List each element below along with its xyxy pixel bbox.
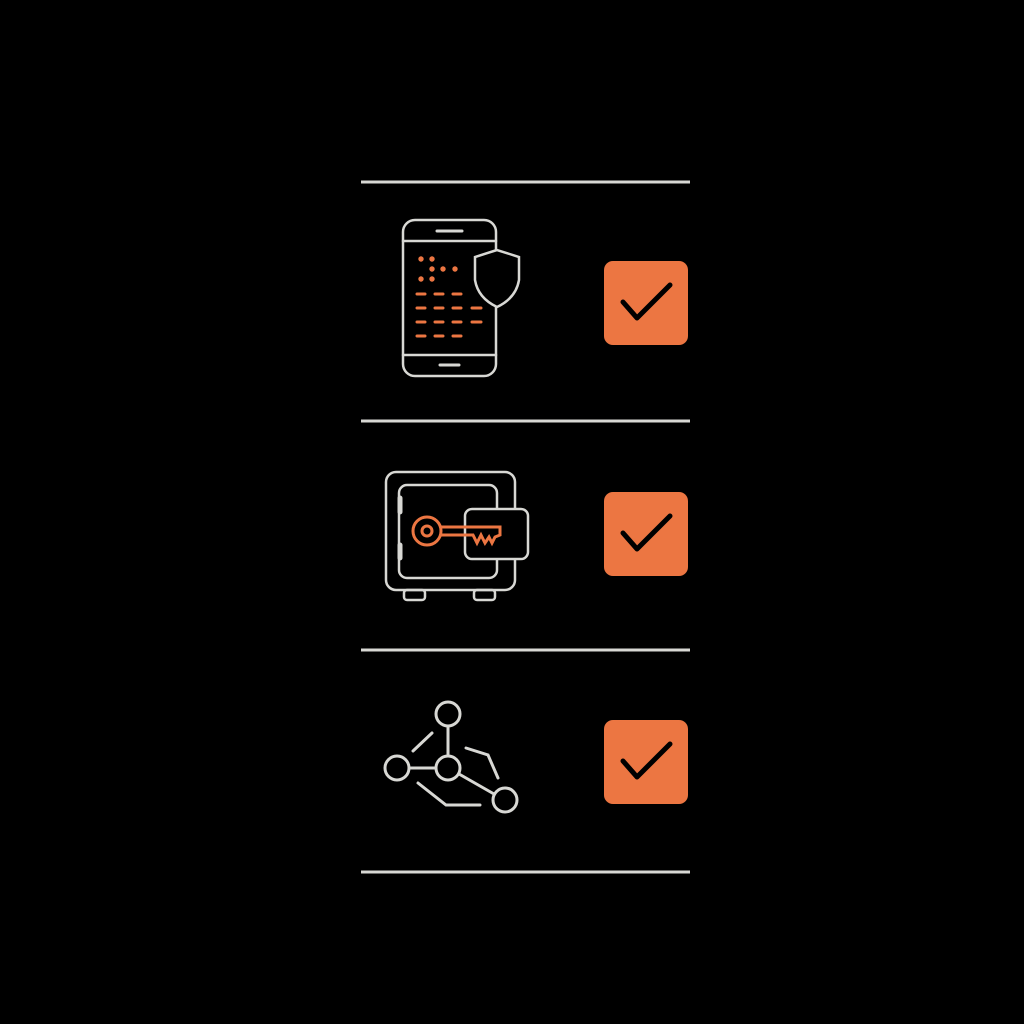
icon: network nodes (385, 702, 517, 812)
icon: secure phone (403, 220, 519, 376)
checkbox 3 (604, 720, 688, 804)
checkbox 2 (604, 492, 688, 576)
icon: safe with key (386, 472, 528, 600)
checkbox 1 (604, 261, 688, 345)
